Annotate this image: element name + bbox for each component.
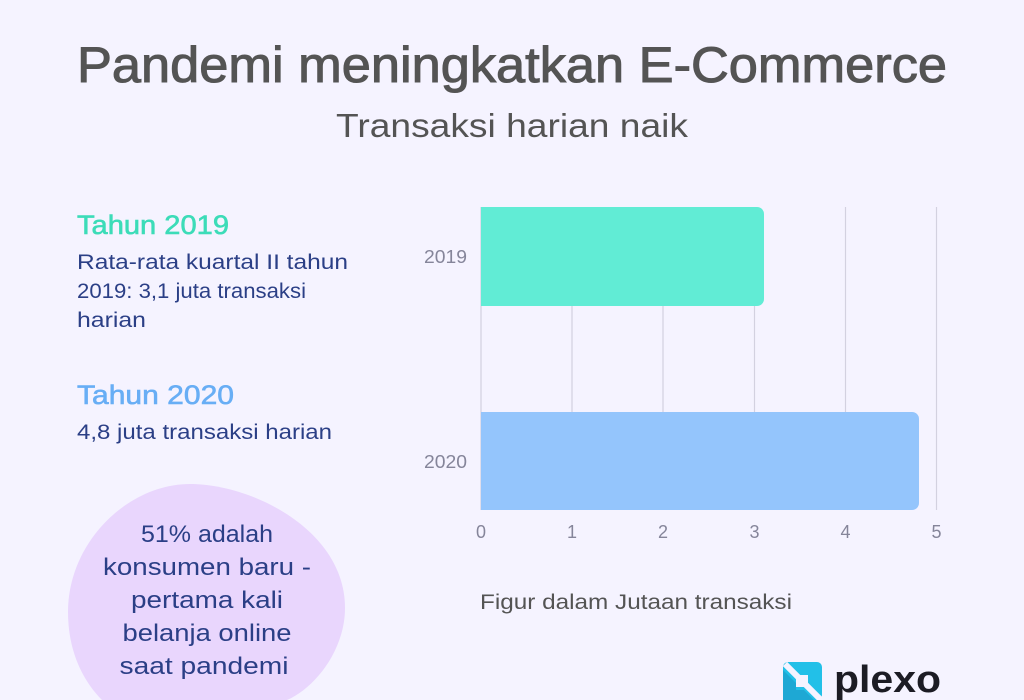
heading: Tahun 2020: Tahun 2020 <box>77 380 234 410</box>
axis labels: 0 <box>476 522 486 542</box>
logo: plexo <box>783 659 941 700</box>
axis labels: 4 <box>840 522 851 542</box>
callout text: pertama kali <box>131 587 283 614</box>
bar: 2020 <box>481 412 919 510</box>
axis labels: 2 <box>658 522 668 542</box>
heading: Tahun 2019: Tahun 2019 <box>77 210 229 240</box>
callout text <box>103 521 311 680</box>
bar chart <box>424 207 942 542</box>
panel: 2019 text block <box>77 210 348 332</box>
axis labels: 5 <box>931 522 942 542</box>
category labels: 2019 <box>424 247 467 267</box>
description: 2020: 4,8 juta transaksi harian <box>77 421 332 444</box>
description: 2019: Rata-rata kuartal II tahun <box>77 251 348 274</box>
axis labels: 3 <box>749 522 760 542</box>
description: 2019: 2019: 3,1 juta transaksi <box>77 280 306 303</box>
category labels: 2020 <box>424 452 467 472</box>
subtitle: Transaksi harian naik <box>336 107 689 144</box>
bar: 2019 <box>481 207 764 306</box>
callout text: saat pandemi <box>120 653 288 680</box>
category labels <box>424 247 467 472</box>
description: 2019 <box>77 251 348 332</box>
callout text: 51% adalah <box>141 521 273 548</box>
callout text: belanja online <box>122 620 292 647</box>
panel: 2020 text block <box>77 380 332 444</box>
axis labels: 1 <box>567 522 577 542</box>
wordmark: plexo <box>834 659 941 700</box>
icon: plexo mark <box>783 662 822 700</box>
description: 2019: harian <box>77 309 146 332</box>
callout text: konsumen baru - <box>103 554 311 581</box>
callout: new consumers blob <box>68 484 345 700</box>
title: Pandemi meningkatkan E-Commerce <box>77 37 947 93</box>
axis labels <box>476 522 942 542</box>
chart caption: Figur dalam Jutaan transaksi <box>480 591 792 614</box>
